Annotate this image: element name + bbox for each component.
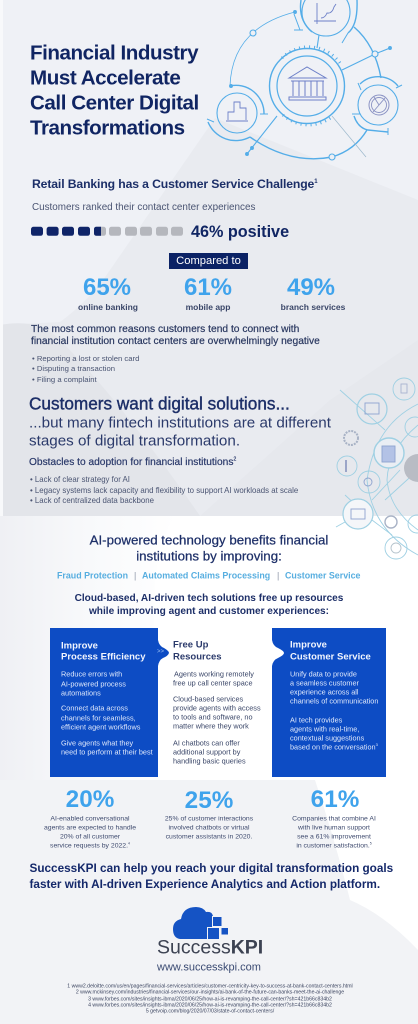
list: reasons: • Reporting a lost or stolen card (32, 354, 139, 363)
panel: improve customer service: Improve (290, 639, 327, 650)
hero network illustration (206, 0, 402, 160)
panel: free up resources: provide agents with access (173, 703, 261, 712)
panel: improve process efficiency: Give agents what they (61, 738, 133, 747)
subheading: cloud-based: Cloud-based, AI-driven tech solutions free up resources (75, 593, 343, 604)
subheading: Customers ranked their contact center experiences (32, 202, 255, 213)
list: obstacles (30, 475, 298, 505)
stat: 61 percent: with live human support (298, 825, 370, 832)
heading: AI-powered benefits: AI-powered technology benefits financial (90, 532, 328, 547)
panel: improve process efficiency: Reduce errors with (61, 669, 122, 678)
list: obstacles: • Lack of centralized data backbone (30, 496, 154, 505)
panel: free up resources: handling basic queries (173, 756, 246, 765)
list: obstacles: • Lack of clear strategy for AI (30, 475, 130, 484)
icon: growth chart (314, 3, 336, 24)
title: Financial Industry (30, 41, 198, 64)
benefit links: | (134, 571, 136, 581)
footnotes: 3 www.forbes.com/sites/insights-ibma/2020/06/25/how-ai-is-revamping-the-call-center/?sh=421b66c834b2 (88, 996, 332, 1002)
benefit links: Automated Claims Processing (142, 571, 270, 581)
46 percent positive: 46% positive (191, 223, 289, 241)
panel: free up resources: matter where they work (173, 721, 249, 730)
stat: 61 percent: 61% (311, 786, 359, 813)
stat: branch services: 49% (287, 274, 335, 301)
compared to label: Compared to (176, 255, 241, 267)
stat: 61 percent: see a 61% improvement (297, 834, 371, 841)
panel: improve customer service: a seamless customer (290, 678, 359, 687)
icon: pie (369, 95, 389, 115)
website url: www.successkpi.com (157, 962, 261, 974)
stat: 20 percent: 20% of all customer (60, 834, 120, 841)
top chart circle (294, 0, 357, 43)
subheading: fintech stages (29, 414, 331, 449)
stat: 25 percent: involved chatbots or virtual (168, 825, 250, 832)
heading: AI-powered benefits: institutions by improving: (136, 548, 282, 563)
stat: 20 percent: AI-enabled conversational (50, 816, 130, 823)
text: reasons to connect: The most common reasons customers tend to connect with (31, 323, 299, 334)
panel: free up resources: Resources (173, 651, 222, 662)
icon: cloud with squares (173, 907, 228, 939)
title: Transformations (30, 116, 185, 139)
panel: free up resources: Free Up (173, 639, 208, 650)
panel: free up resources: Cloud-based services (173, 694, 243, 703)
panel: improve process efficiency: automations (61, 688, 101, 697)
benefit links: Fraud Protection (57, 571, 128, 581)
panel: free up resources: to tools and software, no (173, 712, 253, 721)
stat: 20 percent (44, 786, 136, 849)
panel: improve process efficiency: need to perform at their best (61, 747, 153, 756)
stat: branch services: branch services (281, 302, 345, 312)
list: reasons: • Disputing a transaction (32, 364, 115, 373)
stat: online banking: 65% (83, 274, 131, 301)
logo: SuccessKPI: SuccessKPI (157, 936, 263, 958)
panel: improve process efficiency: Connect data across (61, 703, 128, 712)
panel: improve customer service: based on the conversation3 (290, 742, 378, 751)
call to action (30, 862, 393, 891)
connecting arcs and nodes (230, 11, 391, 160)
panel: improve customer service: AI tech provides (290, 715, 342, 724)
panel: improve customer service: contextual suggestions (290, 733, 364, 742)
stat: 20 percent: 20% (66, 786, 114, 813)
title (30, 41, 199, 139)
stat: branch services (281, 274, 345, 312)
stat: online banking (78, 274, 138, 312)
benefit links: Customer Service (285, 571, 360, 581)
progress bar: 46 percent (31, 226, 183, 236)
text: reasons to connect: financial institution contact centers are overwhelmingly negative (31, 336, 320, 347)
panel: improve process efficiency: Process Efficiency (61, 651, 146, 662)
list: reasons: • Filing a complaint (32, 375, 97, 384)
footnotes: 5 getvoip.com/blog/2020/07/03/state-of-contact-centers/ (146, 1008, 274, 1014)
large network arcs (340, 390, 418, 555)
stat: mobile app: 61% (184, 274, 232, 301)
stat: mobile app: mobile app (186, 302, 230, 312)
list: reasons (32, 354, 139, 384)
panel: improve customer service: experience across all (290, 687, 359, 696)
benefit links (57, 571, 360, 581)
title: Call Center Digital (30, 91, 199, 114)
footnotes (67, 983, 353, 1014)
logo: SuccessKPI (157, 907, 263, 958)
panel: improve process efficiency: Improve (61, 640, 98, 651)
footnotes: 2 www.mckinsey.com/industries/financial-services/our-insights/ai-bank-of-the-future-can-banks-meet-the-ai-challenge (76, 989, 344, 995)
panel: improve customer service: channels of communication (290, 696, 378, 705)
heading: customers want digital solutions: Customers want digital solutions... (29, 393, 290, 413)
icon nodes (336, 378, 418, 559)
panel: free up resources: free up call center space (173, 678, 252, 687)
panel: improve customer service: Customer Service (290, 651, 371, 662)
panel: improve customer service (272, 628, 386, 777)
subheading: cloud-based (75, 593, 343, 617)
stat: 20 percent: agents are expected to handle (44, 825, 136, 832)
panel: improve process efficiency: >> (157, 649, 164, 655)
stat: 25 percent: 25% (185, 787, 233, 814)
stat: 25 percent (165, 787, 253, 841)
left bar chart circle (207, 85, 268, 141)
stat: 61 percent: Companies that combine AI (292, 816, 376, 823)
subheading: cloud-based: while improving agent and customer experiences: (89, 606, 329, 617)
stat: 25 percent: 25% of customer interactions (165, 816, 253, 823)
call to action: SuccessKPI can help you reach your digital transformation goals (30, 862, 393, 875)
stat: 20 percent: service requests by 2022.4 (50, 841, 130, 849)
call to action: faster with AI-driven Experience Analytics and Action platform. (30, 878, 380, 891)
benefit links: | (277, 571, 279, 581)
panel: improve customer service: Unify data to provide (290, 669, 357, 678)
panel: improve process efficiency: efficient agent workflows (61, 722, 140, 731)
stat: 25 percent: customer assistants in 2020. (166, 834, 252, 841)
footnotes: 4 www.forbes.com/sites/insights-ibma/2020/06/25/how-ai-is-revamping-the-call-center/?sh=421b66c834b2 (88, 1002, 332, 1008)
icon: bars (226, 102, 248, 121)
compared to label (169, 253, 248, 269)
panel: improve customer service: agents with real-time, (290, 724, 359, 733)
panel: free up resources (173, 639, 261, 765)
right pie circle (352, 77, 402, 135)
text: reasons to connect (31, 323, 320, 347)
stat: 61 percent: in customer satisfaction.5 (296, 841, 372, 849)
heading: obstacles: Obstacles to adoption for financial institutions2 (29, 457, 236, 468)
footnotes: 1 www2.deloitte.com/us/en/pages/financial-services/articles/customer-centricity-key-to-success-at-bank-contact-centers.html (67, 983, 353, 989)
subheading: fintech stages: stages of digital transformation. (29, 432, 240, 449)
stat: 61 percent (292, 786, 376, 849)
panel: improve process efficiency: channels for seamless, (61, 713, 136, 722)
panel: free up resources: Agents working remotely (174, 669, 254, 678)
heading: AI-powered benefits (90, 532, 328, 564)
panel: free up resources: additional support by (173, 747, 240, 756)
list: obstacles: • Legacy systems lack capacity and flexibility to support AI workloads at scale (30, 486, 298, 495)
icon: bank building (289, 67, 326, 100)
side network illustration (336, 378, 418, 560)
panel: improve process efficiency (50, 628, 169, 777)
stat: online banking: online banking (78, 302, 138, 312)
heading: customer service challenge: Retail Banking has a Customer Service Challenge1 (32, 177, 317, 191)
central bank circle (270, 47, 344, 125)
panel: free up resources: AI chatbots can offer (173, 738, 240, 747)
subheading: fintech stages: ...but many fintech institutions are at different (29, 414, 331, 431)
panel: improve process efficiency: AI-powered process (61, 679, 126, 688)
title: Must Accelerate (30, 66, 180, 89)
